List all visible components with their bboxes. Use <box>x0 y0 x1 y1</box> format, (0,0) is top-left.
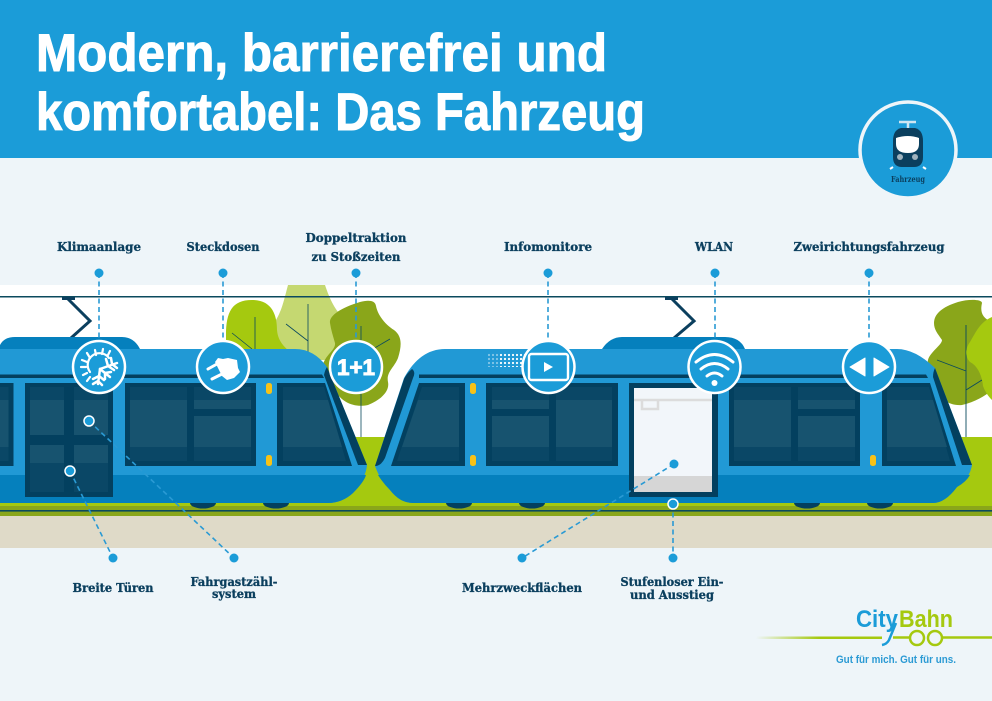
icon: climate <box>73 341 125 393</box>
overhead wire <box>0 296 992 298</box>
wheels <box>190 498 893 508</box>
label: Zweirichtungsfahrzeug: Zweirichtungsfahrzeug <box>794 239 945 254</box>
icon: monitor <box>522 341 574 393</box>
label: Doppeltraktion: zu Stoßzeiten <box>312 249 400 264</box>
label: Fahrgastzählsystem <box>190 574 278 601</box>
callout lines <box>70 273 869 558</box>
pantograph right <box>602 298 745 349</box>
badge: Fahrzeug <box>860 102 956 198</box>
label: Fahrgastzählsystem: Fahrgastzähl- <box>190 574 278 589</box>
title: komfortabel: Das Fahrzeug <box>36 83 645 142</box>
logo: CityBahn: Bahn <box>899 606 953 633</box>
header band <box>0 0 992 158</box>
label: Doppeltraktion: Doppeltraktion <box>306 230 406 245</box>
label: Stufenloser Ein- und Ausstieg: Stufenloser Ein- <box>620 574 724 589</box>
tree: light green <box>276 285 345 360</box>
indicator lights <box>470 383 876 466</box>
icon: plug <box>197 341 249 393</box>
tree: lime <box>226 300 300 360</box>
scenery background <box>0 285 992 438</box>
ground <box>0 437 992 548</box>
callout dots <box>65 268 874 562</box>
icon: tram front <box>890 122 926 169</box>
tram left windows <box>0 383 352 466</box>
tree: olive <box>322 301 401 438</box>
label: Infomonitore: Infomonitore <box>504 239 592 254</box>
speaker dots <box>487 353 526 367</box>
label: Fahrgastzählsystem: system <box>212 586 256 601</box>
badge: Fahrzeug: Fahrzeug <box>891 174 925 184</box>
label: Klimaanlage: Klimaanlage <box>57 239 141 254</box>
logo: CityBahn: City <box>856 606 899 633</box>
label: Mehrzweckflächen: Mehrzweckflächen <box>462 580 582 595</box>
tram right open door <box>629 383 718 497</box>
tree: right lime <box>966 317 992 400</box>
tram right windows <box>391 383 956 466</box>
icon: wifi <box>688 341 740 393</box>
pantograph left <box>0 298 140 349</box>
indicator lights <box>266 383 272 466</box>
label: Steckdosen: Steckdosen <box>186 239 260 254</box>
logo: CityBahn <box>756 606 992 666</box>
label: Stufenloser Ein- und Ausstieg: und Ausstieg <box>630 587 714 602</box>
label: Doppeltraktion <box>306 230 406 264</box>
icon: 1+1: 1+1 <box>337 355 375 380</box>
label: Stufenloser Ein- und Ausstieg <box>620 574 724 602</box>
title <box>36 24 645 142</box>
tram right <box>375 349 972 503</box>
label: WLAN: WLAN <box>694 239 733 254</box>
icon: 1+1 <box>330 341 382 393</box>
tree: right olive <box>928 300 992 438</box>
logo: CityBahn: Gut für mich. Gut für uns. <box>836 654 956 666</box>
title: Modern, barrierefrei und <box>36 24 607 83</box>
label: Breite Türen: Breite Türen <box>72 580 154 595</box>
tram left <box>0 349 367 503</box>
icon: arrows <box>843 341 895 393</box>
tram left door <box>25 383 113 497</box>
